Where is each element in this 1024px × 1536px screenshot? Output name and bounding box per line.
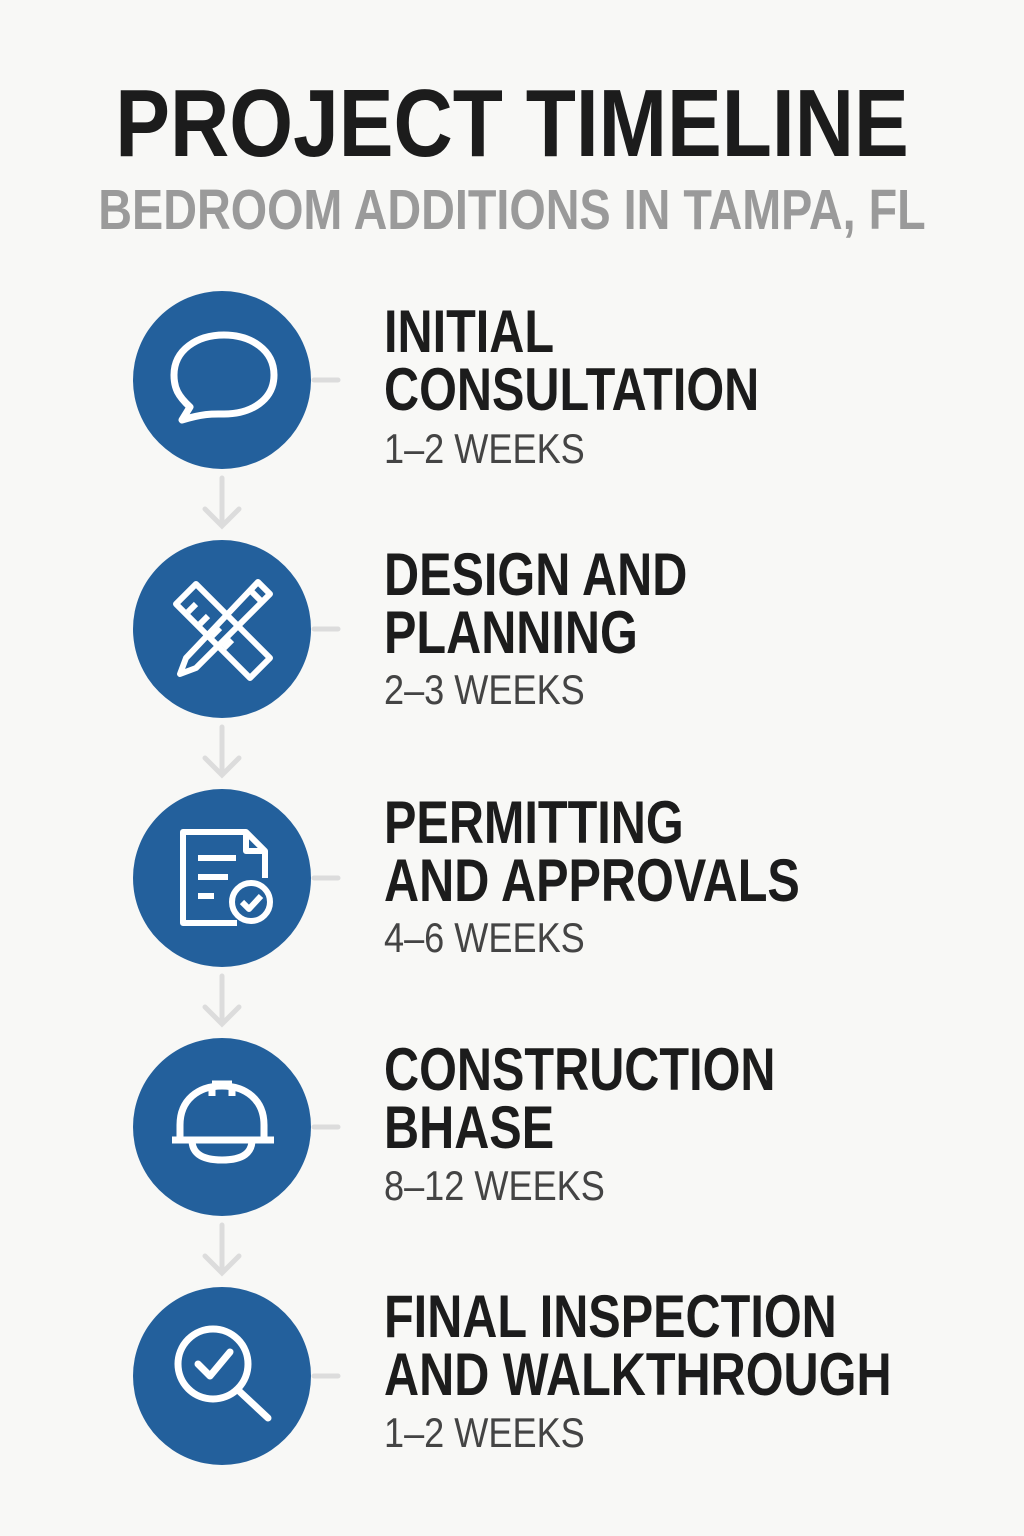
- step 5 text: [384, 1283, 892, 1456]
- step 3 text: AND APPROVALS: [384, 847, 800, 914]
- step 3 text: PERMITTING: [384, 789, 684, 856]
- step 4 text: CONSTRUCTION: [384, 1036, 775, 1103]
- step 2 text: [384, 541, 687, 713]
- step 2 text: 2–3 WEEKS: [384, 666, 585, 713]
- icon: speech bubble: [174, 335, 274, 420]
- step 5 text: FINAL INSPECTION: [384, 1283, 837, 1350]
- connectors and arrows: [205, 380, 338, 1376]
- step 4 text: BHASE: [384, 1094, 554, 1161]
- icon: document with check: [183, 832, 270, 923]
- step 4 text: [384, 1036, 775, 1209]
- step 1 text: CONSULTATION: [384, 356, 759, 423]
- step 3 text: [384, 789, 800, 961]
- icon: magnifier with check: [178, 1329, 268, 1418]
- step 1 text: 1–2 WEEKS: [384, 425, 585, 472]
- step 1 text: [384, 298, 759, 472]
- icon: hard hat: [172, 1084, 274, 1160]
- step 5 text: 1–2 WEEKS: [384, 1409, 585, 1456]
- step 3 text: 4–6 WEEKS: [384, 914, 585, 961]
- step 5 text: AND WALKTHROUGH: [384, 1341, 892, 1408]
- step 1 text: INITIAL: [384, 298, 554, 365]
- subtitle: BEDROOM ADDITIONS IN TAMPA, FL: [98, 178, 926, 242]
- step 2 text: DESIGN AND: [384, 541, 687, 608]
- icon: pencil and ruler: [176, 582, 270, 678]
- step 2 text: PLANNING: [384, 599, 638, 666]
- step circles: [133, 291, 311, 1465]
- step 4 text: 8–12 WEEKS: [384, 1162, 605, 1209]
- title: PROJECT TIMELINE: [115, 70, 909, 177]
